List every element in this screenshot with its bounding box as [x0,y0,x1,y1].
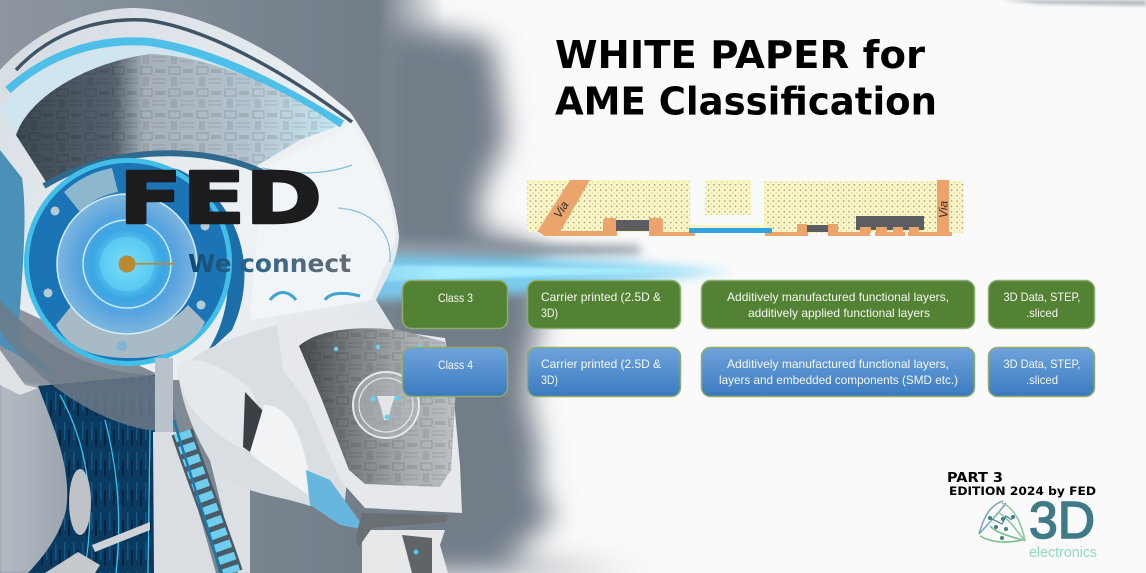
class 4 data box: 3D Data, STEP, [1004,358,1080,371]
class 4 carrier box [528,348,680,396]
collar white tab [0,350,38,395]
arm dark socket [243,392,264,452]
logo 3D text: 3D [1029,492,1095,550]
logo electronics text: electronics [1029,545,1097,561]
robot head shell [0,8,399,380]
dome with circuit board [16,54,338,185]
class 3 data box [988,280,1094,328]
electronic components [616,216,924,232]
We connect tagline with pointer [118,249,351,278]
glass band over eye [44,153,262,186]
3D electronics logo [979,492,1097,561]
row: class 3 [402,280,1094,328]
title: AME Classification [555,80,937,124]
class 3 functional layers box [702,280,974,328]
class 3 carrier box [528,280,680,328]
face highlight [250,169,395,320]
FED logo: FED [119,157,322,240]
eye outer crescent [172,168,244,349]
dome dark upper line [16,20,352,122]
elbow joint [178,360,262,452]
We connect tagline with pointer: We connect [188,249,351,278]
face contour lines and cyan accents [262,165,390,300]
via label left: Via [551,198,572,221]
class 3 functional layers box: additively applied functional layers [748,307,930,320]
via label right: Via [936,201,950,218]
circuit panel on fist [299,328,456,487]
printed blue conductive layer [689,228,772,233]
light beam from robot eye level [350,254,735,302]
class 4 data box [988,348,1094,396]
white arm strip beside cable [210,460,250,573]
translucent collar [0,300,180,432]
row: class 4 [402,348,1094,396]
copper traces and pads [537,180,952,236]
class 4 label box: Class 4 [438,359,473,372]
fist frame [276,317,462,513]
part and edition text [947,470,1096,498]
class 3 label box [402,280,508,328]
class 4 functional layers box: Additively manufactured functional layers, [727,358,949,371]
part and edition text: PART 3 [947,470,1003,486]
dome glass rim [0,46,246,134]
component solder pads [860,227,919,233]
class 3 carrier box: 3D) [541,307,558,320]
class 3 data box: 3D Data, STEP, [1004,291,1080,304]
robot illustration [0,8,462,573]
class 4 carrier box: Carrier printed (2.5D & [541,358,661,371]
forearm cylinder [250,405,308,495]
cross-section diagram [527,180,964,236]
class 3 data box: .sliced [1026,307,1058,320]
neck column [153,432,216,573]
title [555,33,937,124]
neck with circuits [28,375,155,573]
part and edition text: EDITION 2024 by FED [949,484,1096,498]
wrist blue cable [306,470,360,528]
eye ring [24,158,232,366]
class 4 data box: .sliced [1026,374,1058,387]
neck column upper [155,358,173,432]
class 4 carrier box: 3D) [541,374,558,387]
logo swirl icon [979,501,1025,542]
left side glass panel [0,150,60,380]
white upper arm [178,322,348,506]
dome rim cyan [8,41,342,124]
wrist at the bottom [356,513,448,573]
braided cable [174,420,232,573]
title: WHITE PAPER for [555,33,925,77]
class 4 label box [402,348,508,396]
class 3 carrier box: Carrier printed (2.5D & [541,291,661,304]
class 3 functional layers box: Additively manufactured functional layers, [727,291,949,304]
class 4 functional layers box [702,348,974,396]
class 4 functional layers box: layers and embedded components (SMD etc.) [719,374,958,387]
class 3 label box: Class 3 [438,292,473,305]
carrier substrate blocks [527,180,964,233]
